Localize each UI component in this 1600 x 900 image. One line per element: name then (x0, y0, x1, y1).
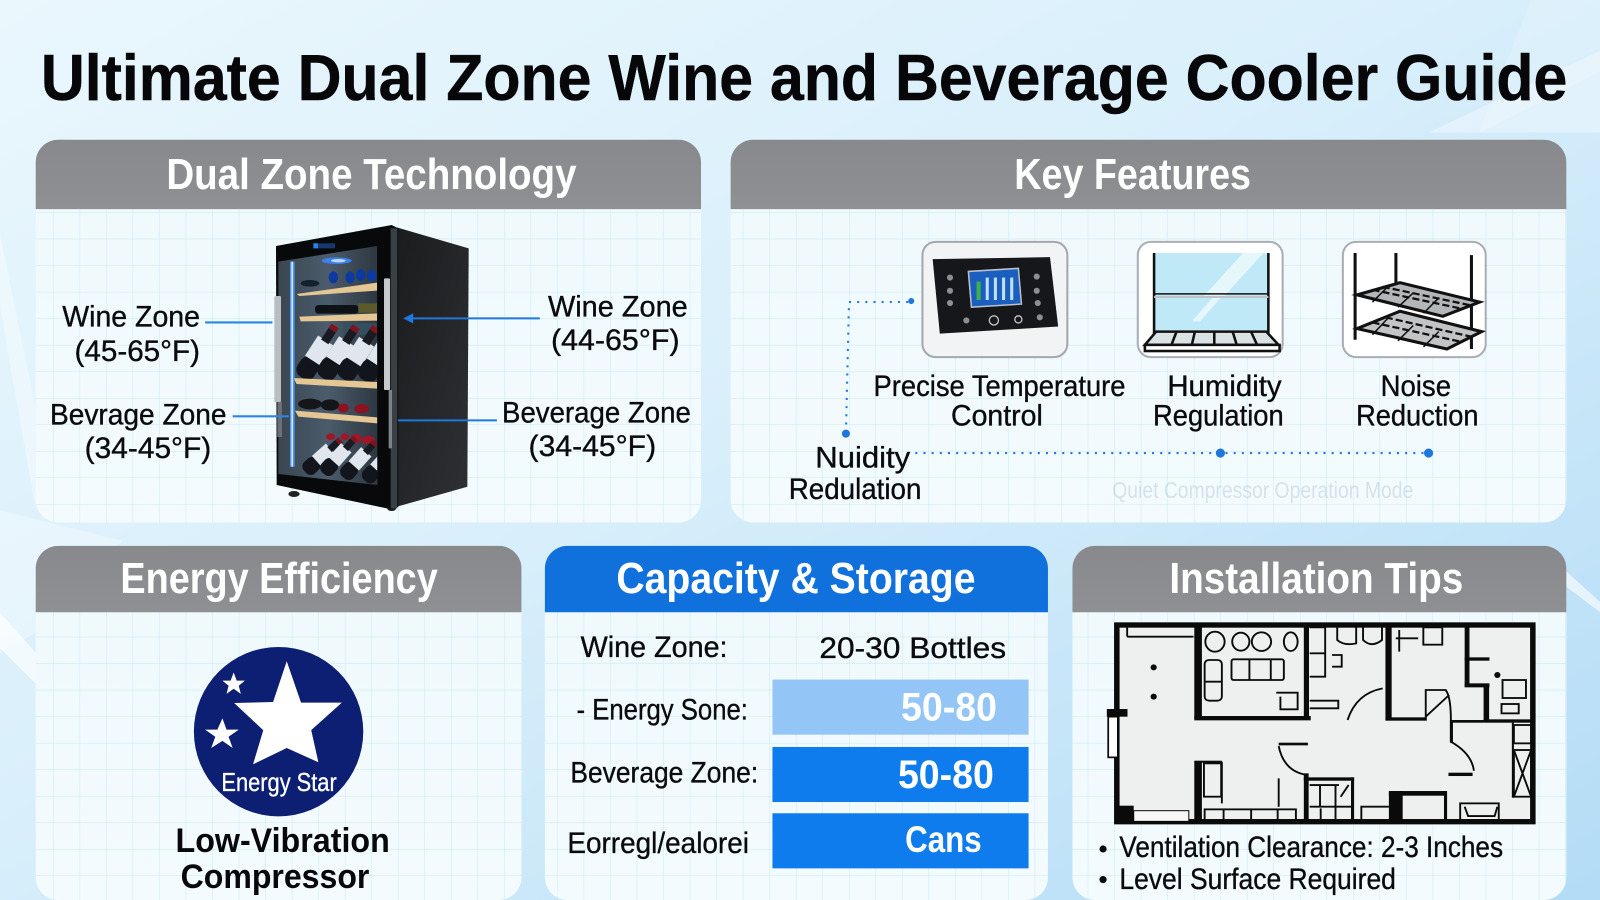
bullet list: installation tips (1099, 831, 1503, 896)
row: wine zone: 20-30 Bottles (819, 632, 1006, 665)
icon: humidity window (1138, 242, 1283, 357)
header: installation tips (1072, 546, 1566, 612)
row: wine zone (581, 631, 1006, 665)
icon: control panel (922, 242, 1067, 357)
callout: wine zone right (403, 290, 688, 357)
row: energy sone: 50-80 (901, 685, 997, 729)
header: key features (731, 140, 1566, 209)
label: nuidity redulation (789, 441, 921, 506)
header: key features: Key Features (1014, 150, 1251, 199)
icon: noise reduction shelves (1343, 242, 1486, 357)
row: energy sone (577, 680, 1029, 735)
callout: beverage zone left: (34-45°F) (85, 432, 211, 465)
callout: wine zone right: (44-65°F) (551, 324, 680, 357)
row: beverage zone (570, 747, 1029, 802)
header: energy efficiency: Energy Efficiency (120, 554, 438, 603)
label: humidity regulation: Humidity (1167, 370, 1282, 403)
faint ghost text: Quiet Compressor Operation Mode (1112, 477, 1413, 503)
row: wine zone: Wine Zone: (581, 631, 728, 664)
callout: beverage zone right: (34-45°F) (529, 430, 656, 463)
label: precise temperature control: Control (951, 400, 1043, 433)
connector: dotted lower (915, 448, 1433, 458)
label: humidity regulation: Regulation (1153, 400, 1284, 433)
panel: capacity and storage (545, 546, 1048, 900)
row: beverage zone: Beverage Zone: (570, 757, 758, 790)
row: energy sone: - Energy Sone: (577, 693, 748, 726)
row: beverage zone: 50-80 (898, 753, 994, 797)
header: energy efficiency (36, 546, 521, 612)
label: humidity regulation (1153, 370, 1284, 433)
label: nuidity redulation: Nuidity (815, 441, 910, 474)
icon: energy star badge: Energy Star (221, 769, 337, 797)
row: cans (567, 813, 1029, 868)
callout: wine zone left: Wine Zone (62, 301, 200, 334)
label: precise temperature control (873, 370, 1126, 433)
callout: wine zone left (62, 301, 272, 368)
bullet list: installation tips: Ventilation Clearance: 2-3 Inches (1119, 831, 1503, 864)
label: low-vibration compressor: Compressor (181, 858, 369, 896)
callout: beverage zone right (398, 396, 691, 463)
panel: dual zone technology (36, 140, 701, 522)
panel: key features (731, 140, 1566, 522)
header: dual zone technology: Dual Zone Technology (166, 150, 577, 199)
header: installation tips: Installation Tips (1169, 554, 1463, 603)
row: cans: Cans (905, 819, 982, 860)
label: noise reduction: Reduction (1356, 400, 1479, 433)
row: cans: Eorregl/ealorei (567, 827, 749, 860)
panel: energy efficiency (36, 546, 521, 900)
icon: energy star badge (194, 647, 363, 816)
bullet list: installation tips: Level Surface Required (1119, 863, 1396, 896)
header: dual zone technology (36, 140, 701, 209)
label: noise reduction (1356, 370, 1479, 433)
floor plan (1107, 625, 1533, 822)
label: low-vibration compressor: Low-Vibration (176, 822, 390, 860)
callout: beverage zone left (50, 398, 289, 465)
callout: wine zone left: (45-65°F) (74, 335, 200, 368)
connector: dotted upper (842, 298, 914, 438)
header: capacity and storage: Capacity & Storage (616, 554, 976, 603)
icon: dual zone cooler (274, 225, 469, 511)
header: capacity and storage (545, 546, 1048, 612)
label: low-vibration compressor (176, 822, 390, 896)
callout: beverage zone left: Bevrage Zone (50, 398, 227, 431)
label: precise temperature control: Precise Temperature (873, 370, 1126, 403)
callout: wine zone right: Wine Zone (548, 290, 688, 323)
label: noise reduction: Noise (1381, 370, 1451, 403)
panel: installation tips (1072, 546, 1566, 900)
callout: beverage zone right: Beverage Zone (502, 396, 691, 429)
label: nuidity redulation: Redulation (789, 473, 921, 506)
